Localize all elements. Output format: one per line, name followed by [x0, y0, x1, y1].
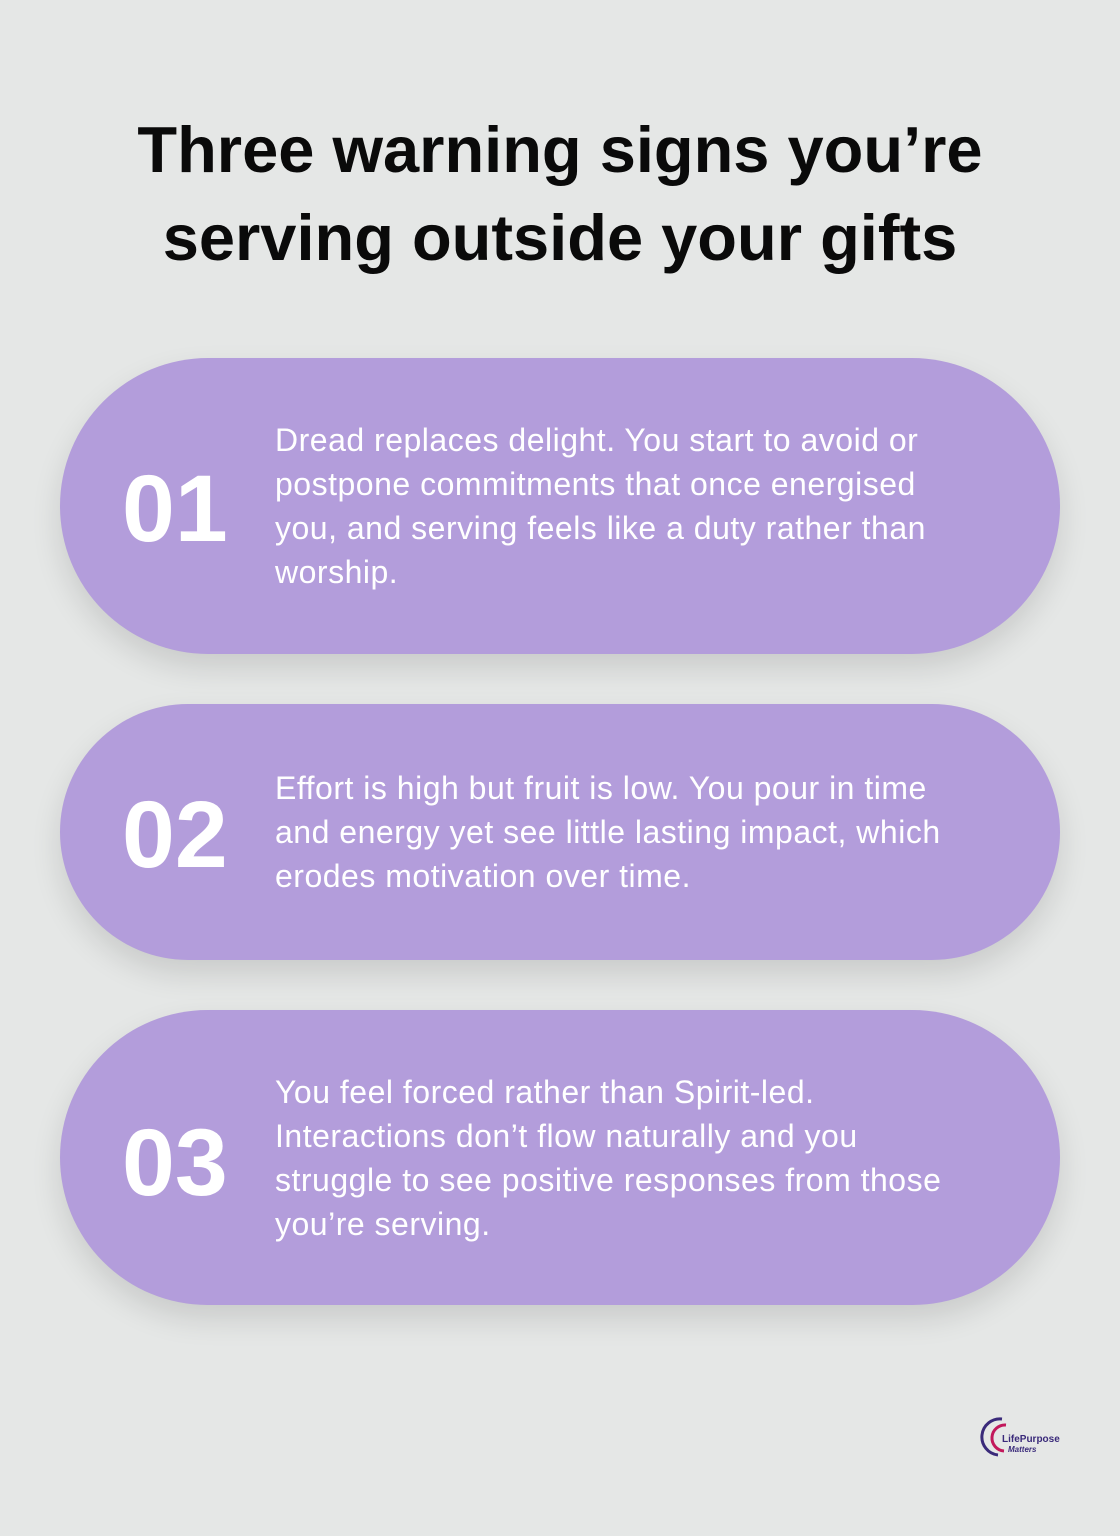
text 01: Dread replaces delight. You start to avoid or: [275, 422, 918, 458]
text 03: Interactions don’t flow naturally and you: [275, 1118, 858, 1154]
text 01: [275, 422, 926, 590]
panel: sign 03: [60, 1010, 1060, 1305]
number 03: 03: [122, 1110, 228, 1216]
text 02: erodes motivation over time.: [275, 858, 691, 894]
title: [137, 113, 983, 274]
text 03: struggle to see positive responses from those: [275, 1162, 941, 1198]
text 01: worship.: [275, 554, 398, 590]
text 02: and energy yet see little lasting impact, which: [275, 814, 941, 850]
title: serving outside your gifts: [163, 201, 957, 274]
number 01: 01: [122, 456, 228, 562]
title: Three warning signs you’re: [137, 113, 983, 186]
logo: [980, 1417, 1060, 1456]
text 02: Effort is high but fruit is low. You pour in time: [275, 770, 927, 806]
panel: sign 02: [60, 704, 1060, 960]
text 01: you, and serving feels like a duty rather than: [275, 510, 926, 546]
logo: LifePurpose: [1002, 1434, 1060, 1445]
number 02: 02: [122, 782, 228, 888]
logo: Matters: [1008, 1445, 1037, 1454]
text 02: [275, 770, 941, 894]
text 01: postpone commitments that once energised: [275, 466, 916, 502]
text 03: you’re serving.: [275, 1206, 491, 1242]
text 03: [275, 1074, 941, 1242]
text 03: You feel forced rather than Spirit-led.: [275, 1074, 815, 1110]
panel: sign 01: [60, 358, 1060, 654]
